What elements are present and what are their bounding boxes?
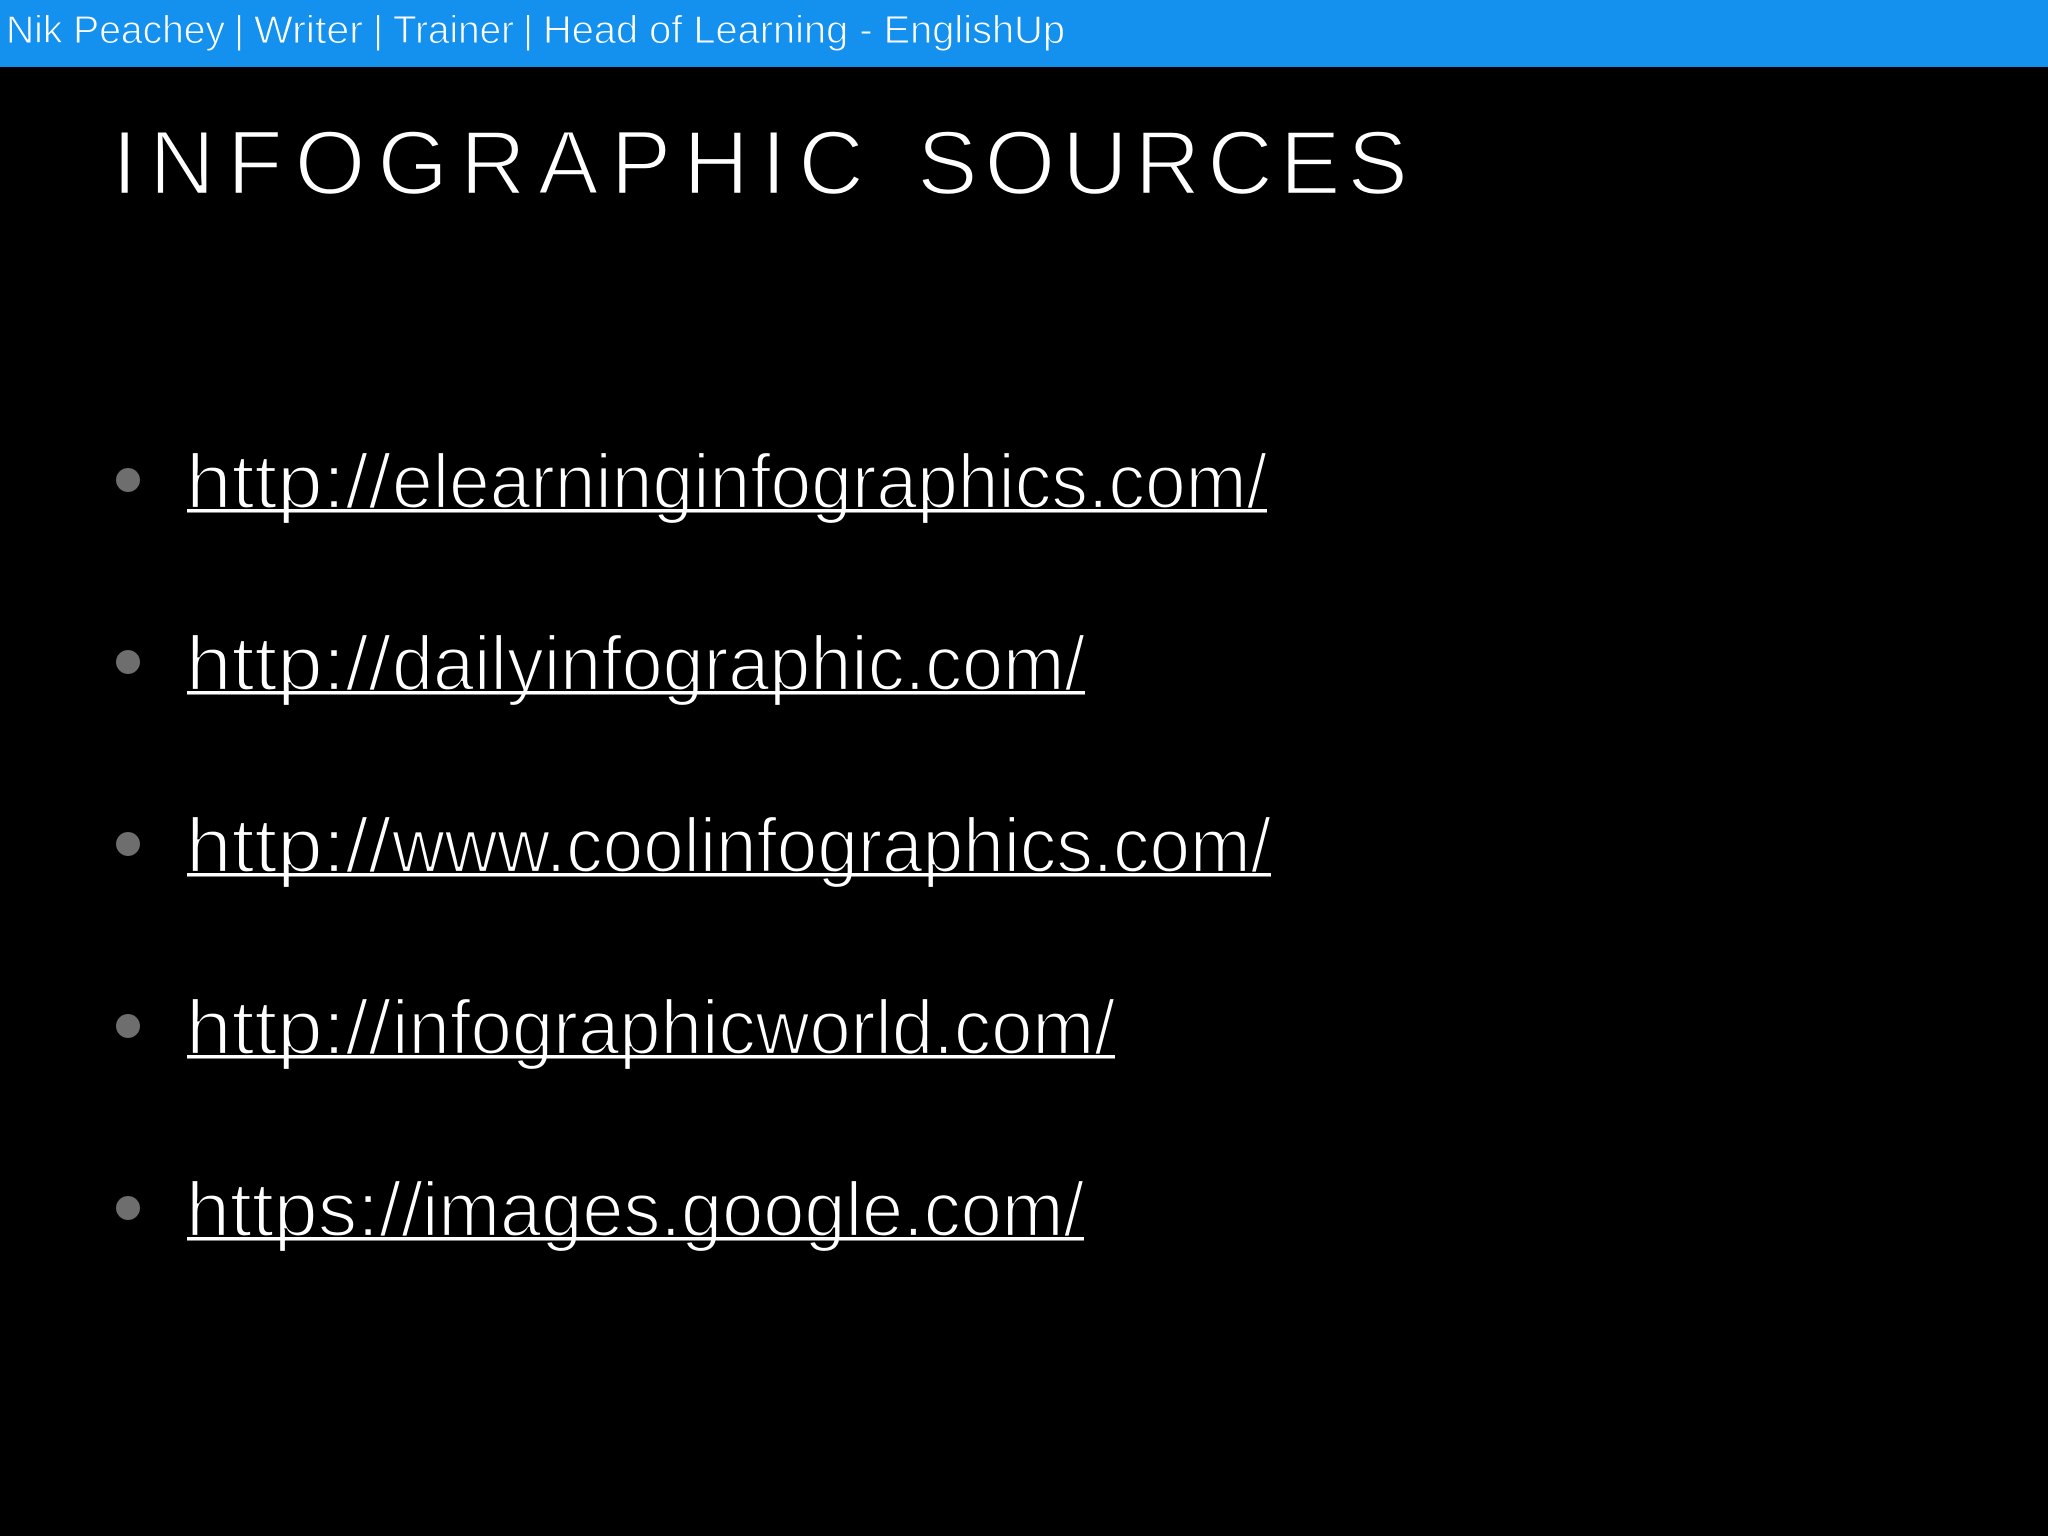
list item: dailyinfographic: http:// <box>186 621 392 707</box>
header text: Nik Peachey <box>6 9 225 52</box>
title: SOURCES <box>917 113 1408 214</box>
header bar <box>0 0 2048 67</box>
title <box>112 113 1408 214</box>
list item: images.google <box>116 1167 1085 1253</box>
header text: Trainer <box>393 9 514 52</box>
title: INFOGRAPHIC <box>112 113 864 214</box>
list item: elearninginfographics: http:// <box>186 439 392 525</box>
list item: coolinfographics: http:// <box>186 803 392 889</box>
list item: coolinfographics: www.coolinfographics.com/ <box>391 803 1272 889</box>
list item: images.google: images.google.com/ <box>422 1167 1085 1253</box>
list item: dailyinfographic <box>116 621 1086 707</box>
list item: infographicworld: http:// <box>186 985 392 1071</box>
list item: dailyinfographic: dailyinfographic.com/ <box>392 621 1086 707</box>
header text: | <box>523 9 533 52</box>
list item: images.google: https:// <box>186 1167 424 1253</box>
link list <box>116 439 1272 1253</box>
header text: Writer <box>254 9 363 52</box>
header text: | <box>234 9 244 52</box>
list item: infographicworld: infographicworld.com/ <box>392 985 1116 1071</box>
header text: | <box>373 9 383 52</box>
header text: Head of Learning - EnglishUp <box>543 9 1065 52</box>
list item: elearninginfographics: elearninginfographics.com/ <box>392 439 1268 525</box>
header text <box>6 9 1065 52</box>
